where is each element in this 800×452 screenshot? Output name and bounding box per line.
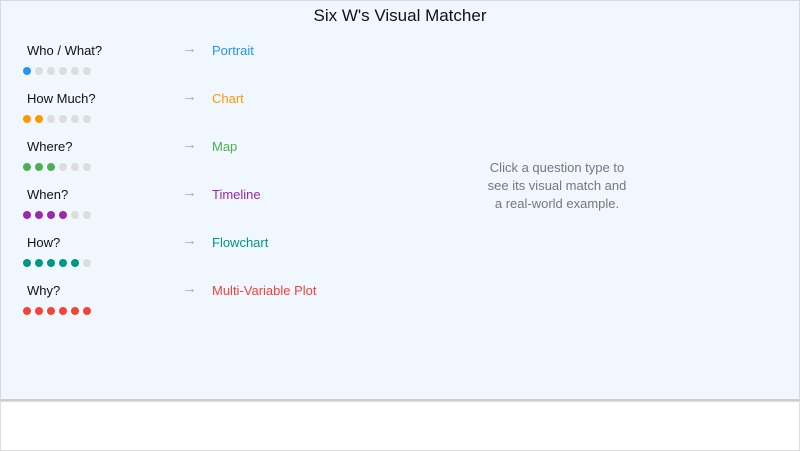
row: how much [23,88,244,123]
row: where: → [182,136,197,153]
hint text: Click a question type to [490,160,624,175]
row: how [23,232,268,267]
row: where [23,136,237,171]
hint text: a real-world example. [495,196,619,211]
row: how: How? [27,235,60,250]
row: who/what: Portrait [212,43,254,58]
row: who/what: → [182,40,197,57]
row: why: Multi-Variable Plot [212,283,317,298]
hint text [488,160,626,211]
panel: bottom detail [0,401,800,451]
row: why: → [182,280,197,297]
row: when: When? [27,187,68,202]
row: why [23,280,317,315]
row: when: → [182,184,197,201]
title: Six W's Visual Matcher [314,6,486,25]
row: where: Map [212,139,237,154]
row: why: Why? [27,283,60,298]
row: where: Where? [27,139,73,154]
row: when: Timeline [212,187,261,202]
row: how much: → [182,88,197,105]
row: when [23,184,261,219]
row: who/what [23,40,254,75]
row: how: Flowchart [212,235,268,250]
hint text: see its visual match and [488,178,626,193]
row: how much: Chart [212,91,244,106]
row: who/what: Who / What? [27,43,102,58]
row: how much: How Much? [27,91,96,106]
row: how: → [182,232,197,249]
